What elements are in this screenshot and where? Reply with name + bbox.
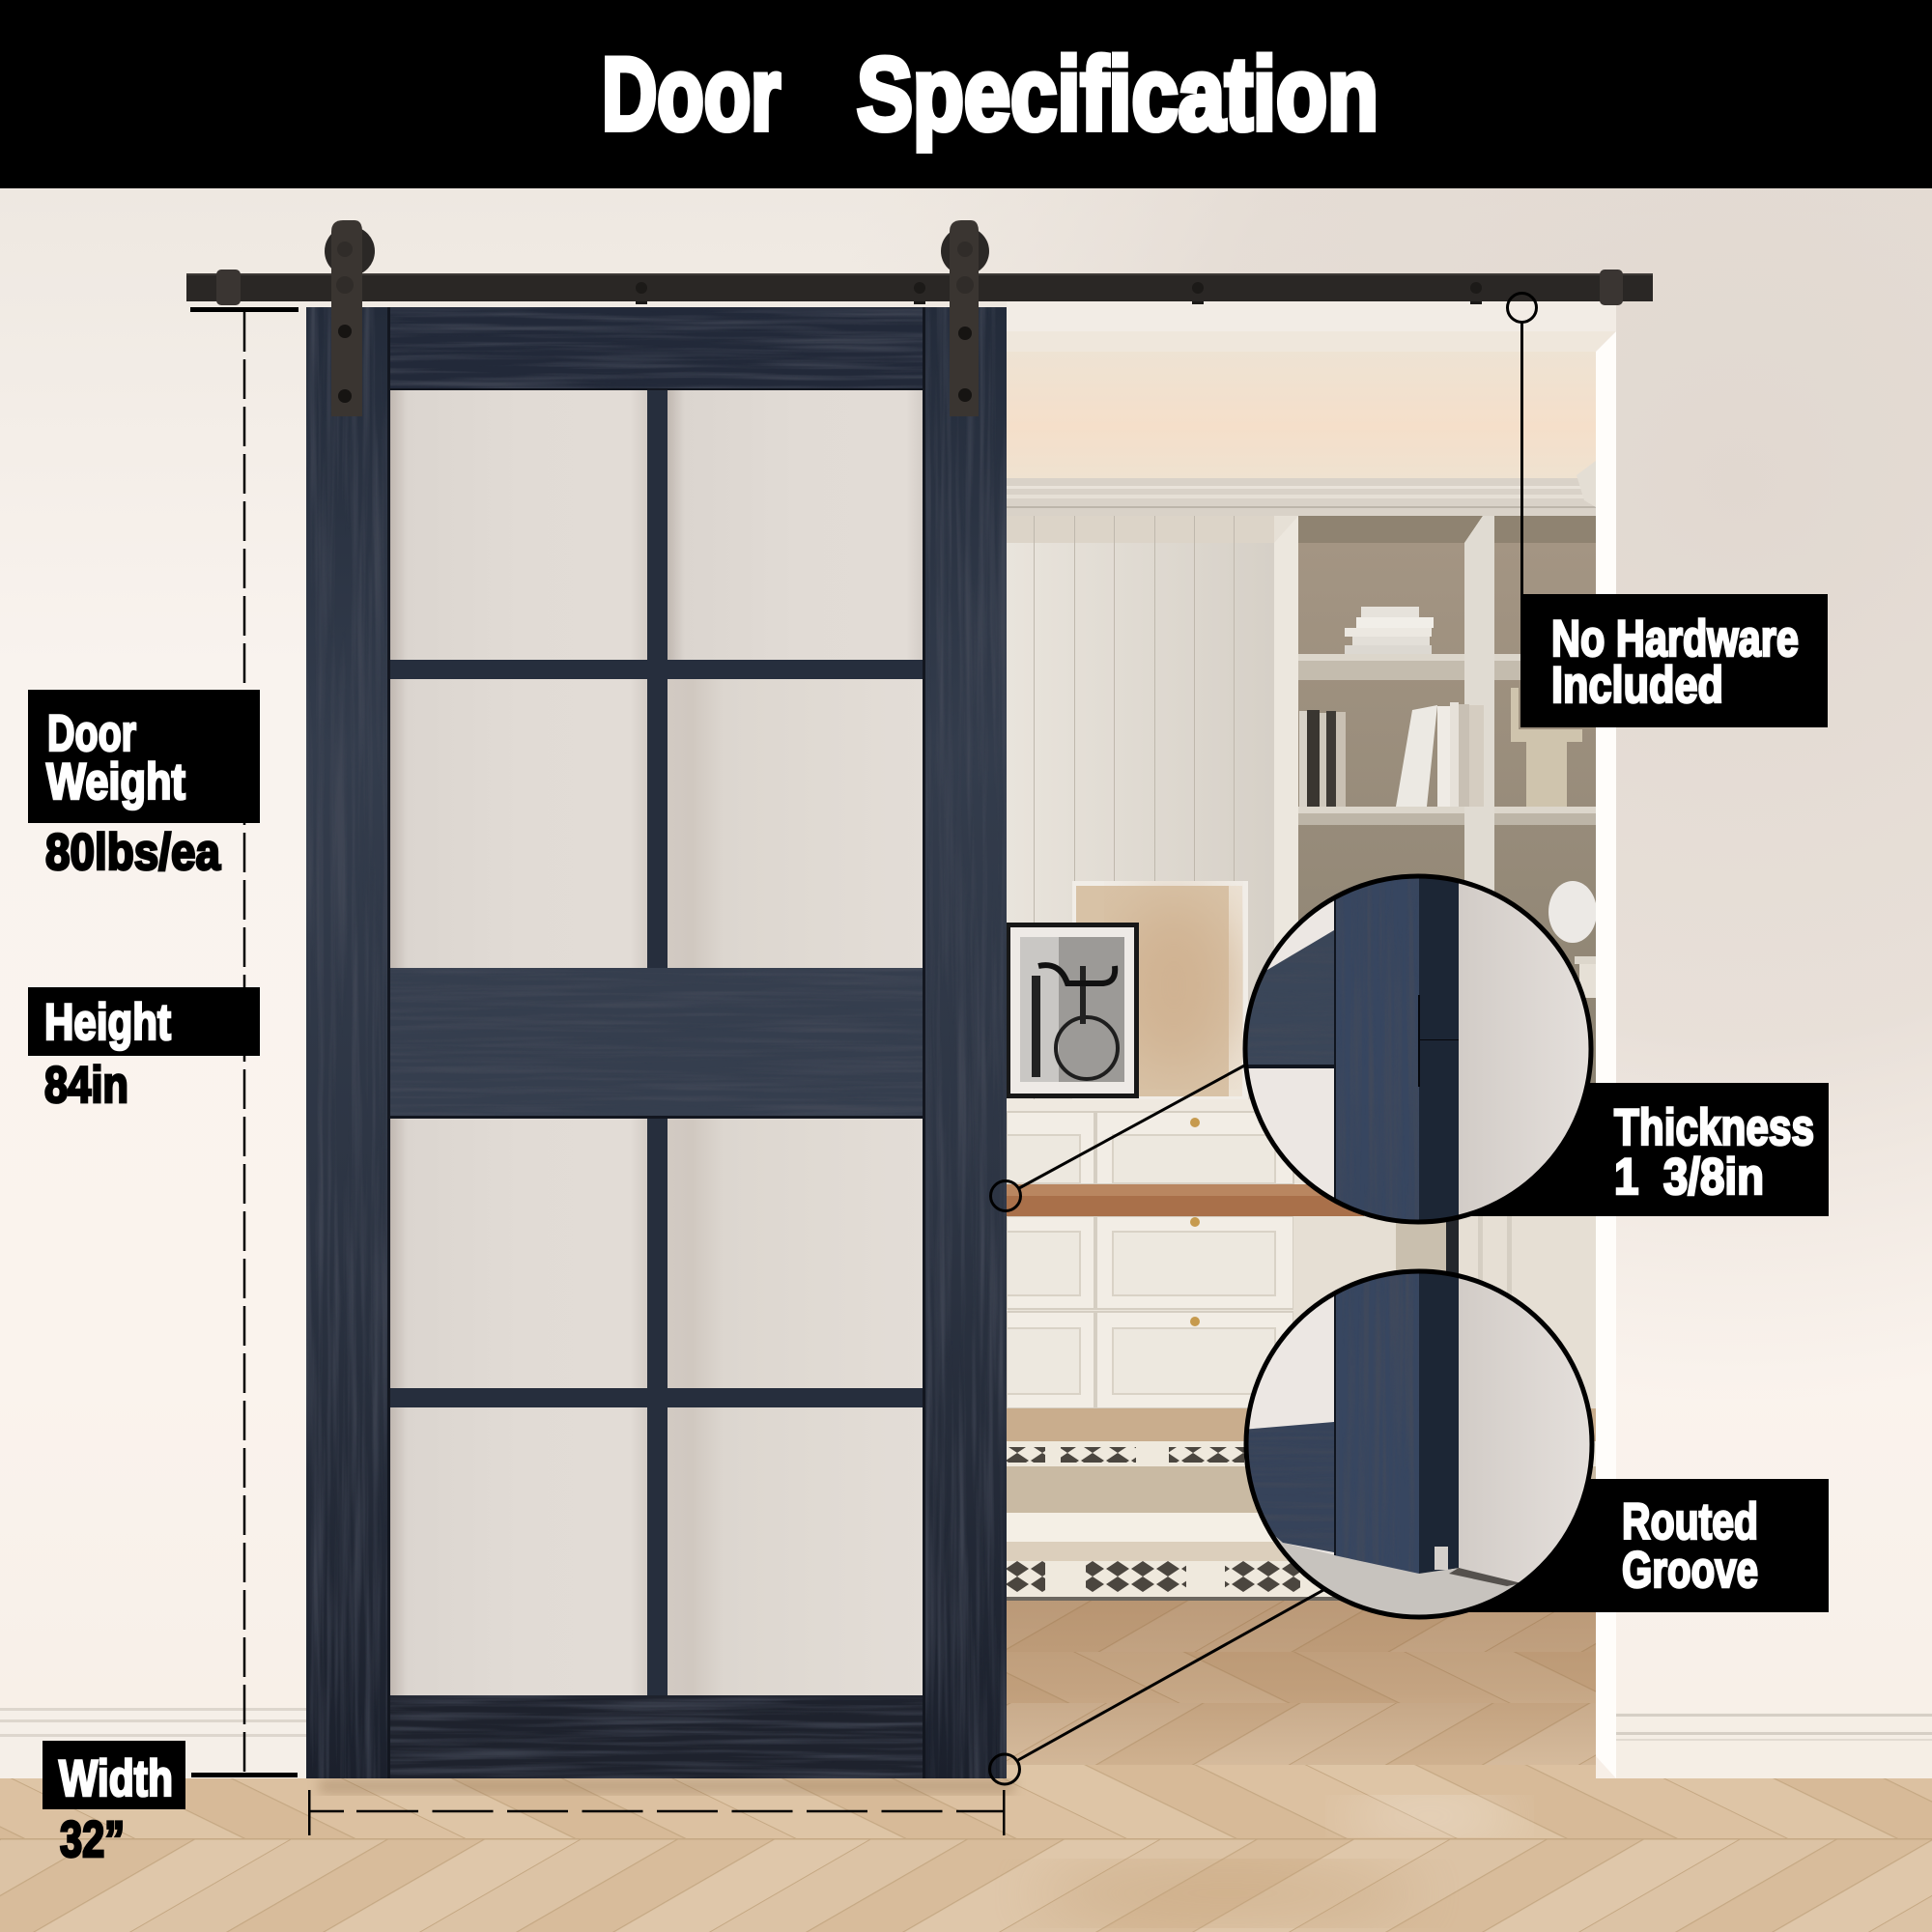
callout: door weight: Weight [46, 753, 185, 810]
interior floor [1007, 1601, 1596, 1778]
vase [1548, 881, 1597, 943]
cabinets [1007, 1099, 1596, 1420]
shelving unit [1274, 516, 1596, 1105]
width dimension line [308, 1790, 1005, 1835]
sculpture [1511, 688, 1582, 807]
right stile [924, 307, 1007, 1778]
callout: no hardware included: No Hardware [1551, 611, 1799, 668]
callout: no hardware included: Included [1551, 657, 1723, 714]
callout: thickness: 1 3/8in [1614, 1149, 1764, 1206]
baseboard left [0, 1708, 306, 1778]
wood grain [306, 307, 1007, 1778]
callout: routed groove: Routed [1622, 1493, 1758, 1550]
callout: height [28, 987, 260, 1114]
title [602, 36, 1378, 152]
soffit [1007, 331, 1616, 352]
magnifier: thickness detail [1236, 869, 1604, 1236]
middle rail [388, 968, 924, 1118]
barn door track [186, 273, 1653, 304]
callout: door weight [28, 690, 260, 881]
books stack [1345, 607, 1434, 654]
callout: thickness [1449, 1083, 1829, 1216]
floor [0, 1778, 1932, 1932]
tan poster [1072, 881, 1248, 1099]
callout: thickness: Thickness [1614, 1099, 1814, 1156]
crown moulding [1007, 461, 1596, 516]
leader: routed groove [989, 1590, 1323, 1784]
leader: thickness [991, 1064, 1248, 1211]
glass panes [389, 390, 924, 1696]
rug [1007, 1441, 1596, 1601]
door jamb [1596, 331, 1616, 1778]
height dimension line [190, 307, 298, 1777]
callout: door weight: 80lbs/ea [45, 824, 220, 881]
wooden counter shelf [1007, 1184, 1364, 1216]
callout: routed groove: Groove [1622, 1542, 1758, 1599]
door [306, 307, 1007, 1778]
callout: door weight: Door [47, 705, 136, 762]
title: Specification [857, 36, 1378, 152]
magnifier: routed groove detail [1236, 1265, 1604, 1625]
interior wood strip [1007, 1408, 1596, 1443]
callout: routed groove [1449, 1479, 1829, 1612]
title: Door [602, 36, 781, 152]
title bar [0, 0, 1932, 188]
interior room through doorway [1006, 331, 1616, 1778]
track bolts [636, 282, 1482, 304]
ceiling [1007, 331, 1596, 478]
right roller hanger [941, 220, 989, 416]
callout: width: 32” [60, 1811, 125, 1868]
framed bicycle photo [1006, 923, 1139, 1098]
callout: no hardware included [1520, 594, 1828, 727]
upright books [1299, 702, 1484, 807]
left end stop [216, 270, 241, 305]
top rail [388, 307, 924, 389]
left roller hanger [325, 220, 375, 416]
bottom rail [388, 1695, 924, 1778]
muntins [388, 389, 924, 1696]
callout: height: 84in [44, 1057, 128, 1114]
callout: width: Width [59, 1750, 173, 1807]
baseboard right [1616, 1713, 1932, 1778]
leader: no hardware [1507, 294, 1536, 595]
right end stop [1600, 270, 1623, 305]
left stile [306, 307, 388, 1778]
beadboard wall [1007, 516, 1274, 1105]
callout: width [43, 1741, 185, 1868]
callout: height: Height [44, 994, 171, 1051]
